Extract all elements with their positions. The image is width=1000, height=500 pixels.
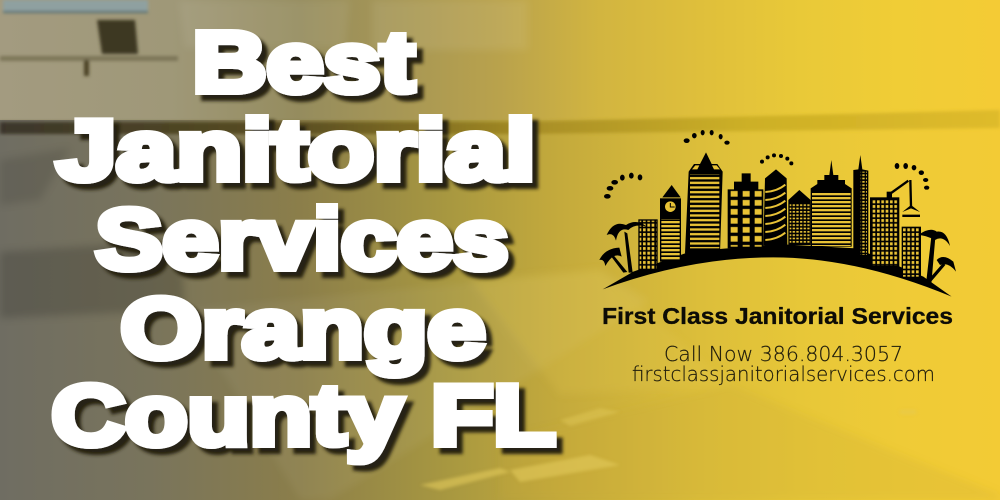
building: left grid: [638, 219, 658, 271]
icon: right palm trees: [918, 230, 956, 284]
title line: County FL: County FL: [52, 368, 556, 464]
website: firstclassjanitorialservices.com: [632, 362, 935, 386]
building: stepped windows tower: [728, 173, 763, 248]
building: far right grid: [902, 227, 921, 278]
logo name: First Class Janitorial Services: First Class Janitorial Services: [602, 303, 953, 329]
title line: Services: Services: [96, 192, 508, 288]
icon: city skyline logo: [599, 130, 956, 297]
building: spire tower: [811, 160, 852, 247]
building: right grid: [870, 197, 899, 267]
icon: crane: [887, 180, 920, 217]
title line: Orange: Orange: [120, 282, 486, 376]
hill: [603, 244, 952, 297]
phone: Call Now 386.804.3057: [664, 342, 903, 366]
title line: Best: Best: [192, 16, 414, 110]
building: curved stripes tower: [763, 169, 787, 245]
contact text: [632, 342, 935, 386]
building: crown tower: [685, 152, 723, 253]
sun rays: [604, 130, 929, 199]
title line: Janitorial: Janitorial: [56, 104, 536, 198]
icon: left palm trees: [599, 222, 647, 273]
building: narrow spire tower: [853, 155, 868, 257]
title: Best Janitorial Services Orange County FL: [52, 16, 556, 464]
building: clock tower: [660, 185, 681, 262]
building: dense grid tower: [788, 190, 811, 245]
